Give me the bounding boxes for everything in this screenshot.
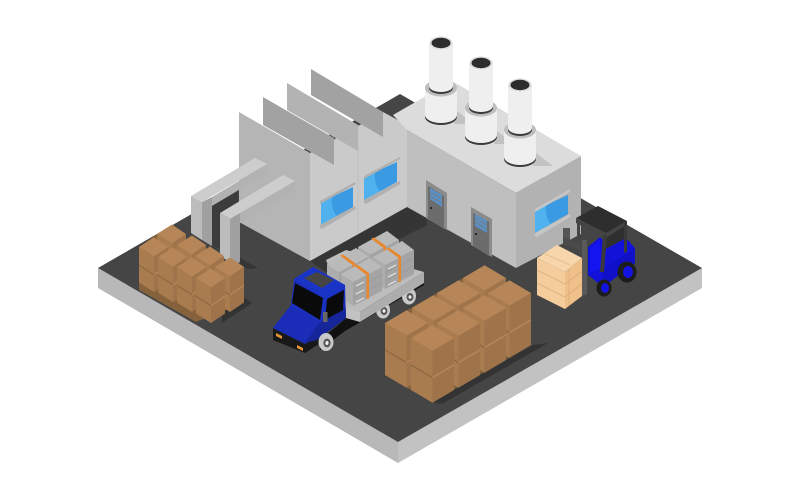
factory left hall with sawtooth roof <box>239 69 407 261</box>
left box pile <box>139 224 244 323</box>
left wall <box>407 130 516 268</box>
chimney 2 <box>465 56 514 145</box>
factory right block <box>393 81 581 268</box>
door 2 <box>471 207 492 257</box>
forklift body <box>588 225 635 287</box>
chimney 1 <box>425 36 474 125</box>
roof <box>393 81 581 193</box>
window 1 <box>320 182 356 229</box>
forklift mast <box>563 228 587 296</box>
pallet of pale boxes <box>537 245 582 309</box>
window 2 <box>364 157 400 204</box>
ground platform <box>98 94 702 463</box>
left box pile shadow <box>222 298 252 323</box>
truck <box>273 231 424 353</box>
building shadow on ground <box>310 207 427 275</box>
forklift <box>537 206 636 309</box>
duct A <box>191 158 267 250</box>
flatbed <box>326 250 424 322</box>
hall front wall <box>310 112 407 261</box>
roof panel 3 <box>311 69 383 137</box>
chimney 3 <box>504 78 553 167</box>
roof panel 1 <box>263 97 334 165</box>
truck cab <box>273 267 346 353</box>
truck rear wheels <box>376 288 416 318</box>
big box pile shadow <box>433 343 548 404</box>
duct B <box>220 175 295 269</box>
forklift wheels <box>596 262 636 296</box>
roof panel 2 <box>287 83 358 151</box>
cargo <box>327 231 414 306</box>
forklift roof and posts <box>576 206 627 272</box>
right wall <box>516 156 581 268</box>
truck shadow and chassis <box>320 274 424 350</box>
hall side wall <box>239 112 310 261</box>
truck front wheel <box>318 333 334 351</box>
window 3 <box>535 189 570 237</box>
door 1 <box>426 180 447 230</box>
big box pile <box>385 265 531 403</box>
